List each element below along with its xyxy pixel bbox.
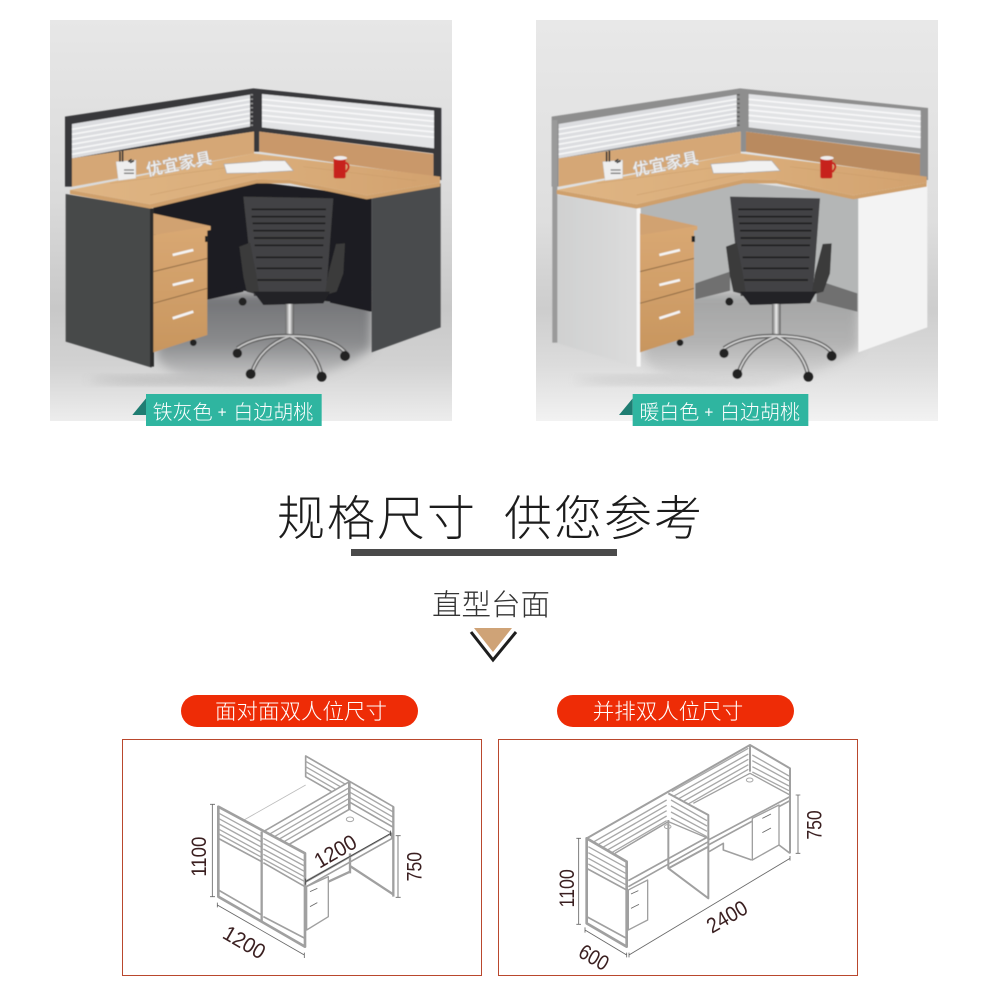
pill: face to face size: 面对面双人位尺寸: [215, 700, 387, 724]
heading: 规格尺寸 供您参考: 规格尺寸: [277, 493, 477, 546]
workstation line drawing with dimensions: 1100: [187, 837, 211, 877]
pill: face to face size: [181, 695, 418, 727]
heading underline: [351, 549, 617, 556]
icon: red mug: [820, 156, 835, 178]
workstation line drawing with dimensions: [555, 745, 827, 976]
colour label: 铁灰色 + 白边胡桃: 白边胡桃: [233, 401, 313, 424]
workstation line drawing with dimensions: 1100: [555, 869, 579, 907]
panel: warm white desk photo: [536, 20, 938, 426]
panel: side by side diagram: [498, 740, 858, 976]
workstation line drawing with dimensions: 2400: [702, 896, 752, 938]
photo background: [50, 20, 452, 421]
colour label: 暖白色 + 白边胡桃: [619, 394, 808, 426]
icon: pen holder: [603, 151, 623, 181]
icon: open book: [711, 161, 780, 173]
brand sign: 优宜家具: [144, 148, 214, 180]
colour label: 暖白色 + 白边胡桃: 白边胡桃: [720, 401, 800, 424]
workstation line drawing with dimensions: 750: [803, 810, 827, 840]
colour label: 铁灰色 + 白边胡桃: [132, 394, 322, 426]
photo background: [536, 20, 938, 421]
subheading: 直型台面: 直型台面: [432, 589, 550, 622]
diagram frame: [122, 740, 482, 976]
pill: side by side size: [557, 695, 794, 727]
office chair: [233, 197, 350, 382]
desk illustration: [65, 88, 441, 384]
workstation line drawing with dimensions: 1200: [310, 830, 361, 873]
desk illustration: [552, 88, 928, 384]
diagram frame: [498, 740, 858, 976]
icon: pen holder: [116, 151, 136, 181]
colour label: 暖白色 + 白边胡桃: 暖白色: [639, 401, 699, 424]
panel: iron grey desk photo: [50, 20, 452, 426]
office chair: [719, 197, 837, 382]
icon: red mug: [334, 156, 349, 178]
colour label: 暖白色 + 白边胡桃: +: [704, 404, 713, 421]
panel: face to face diagram: [122, 740, 482, 976]
icon: open book: [224, 161, 293, 173]
workstation line drawing with dimensions: 600: [575, 940, 613, 976]
workstation line drawing with dimensions: [187, 756, 426, 964]
colour label: 铁灰色 + 白边胡桃: +: [218, 404, 227, 421]
workstation line drawing with dimensions: 1200: [219, 921, 270, 964]
icon: down arrow: [471, 628, 516, 660]
pill: side by side size: 并排双人位尺寸: [593, 700, 743, 724]
heading: 规格尺寸 供您参考: 供您参考: [504, 493, 704, 546]
colour label: 铁灰色 + 白边胡桃: 铁灰色: [153, 401, 213, 424]
workstation line drawing with dimensions: 750: [402, 852, 426, 881]
brand sign: 优宜家具: [631, 148, 701, 180]
